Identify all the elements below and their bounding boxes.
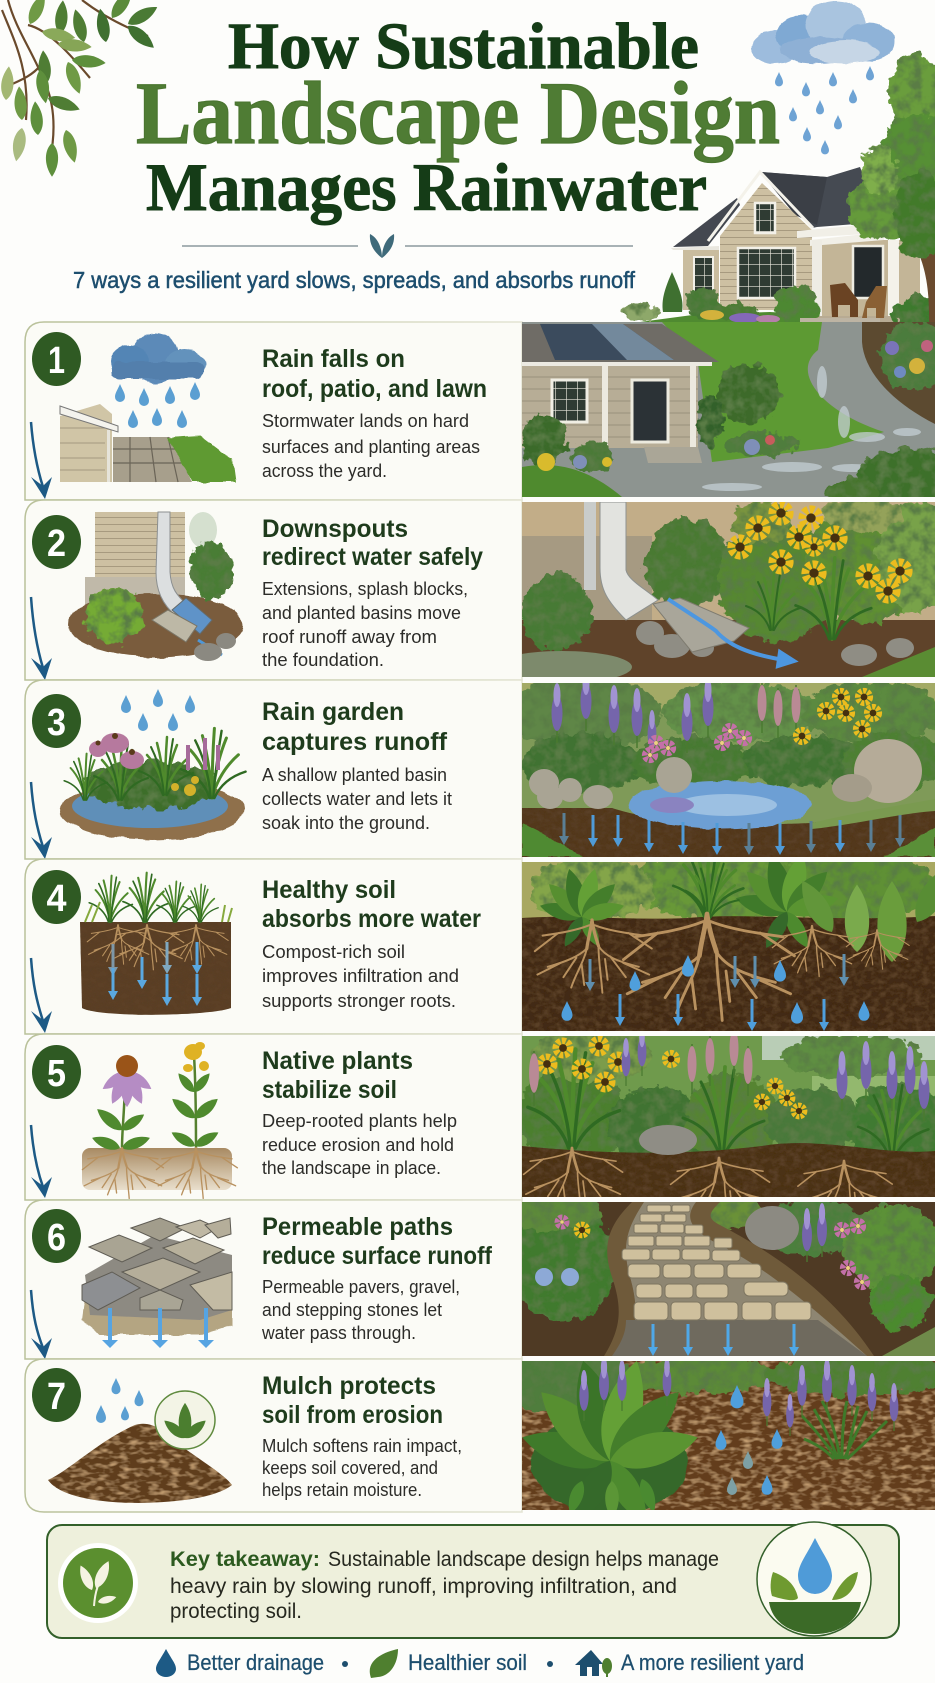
heading [262, 876, 481, 933]
rock [745, 1206, 799, 1250]
illustration: tree [848, 54, 935, 326]
step number 3 [32, 694, 81, 748]
pink spikes [758, 683, 766, 733]
body text: A shallow planted basin [262, 765, 447, 785]
body text: Deep-rooted plants help [262, 1111, 457, 1131]
separator dot [547, 1661, 553, 1667]
heading: Native plants [262, 1047, 413, 1075]
rocks [529, 757, 692, 809]
left roof [673, 198, 740, 247]
step number 2: 2 [47, 523, 66, 565]
coneflower [100, 1055, 154, 1107]
wet path highlights [702, 366, 921, 491]
infiltration arrows [559, 813, 905, 855]
icon: downspout with splash block [67, 512, 243, 661]
purple spikes [552, 683, 562, 743]
heading [262, 698, 448, 756]
drops [716, 1385, 782, 1495]
icon: cloud, rain and yard [60, 333, 236, 482]
label: a more resilient yard: A more resilient yard [621, 1650, 804, 1675]
soil [522, 801, 935, 857]
porch steps [800, 318, 880, 324]
panel background [25, 500, 522, 680]
title line 2: Landscape Design [136, 65, 780, 163]
big leaves [538, 867, 626, 950]
body text: Stormwater lands on hard [262, 411, 469, 431]
body text [262, 1111, 457, 1178]
body text: and stepping stones let [262, 1300, 442, 1320]
blue arrows [648, 1324, 799, 1356]
icon: soil block with roots [80, 873, 232, 1015]
body text: across the yard. [262, 461, 387, 481]
heading: Permeable paths [262, 1213, 453, 1241]
body text [262, 765, 452, 833]
rock [639, 1125, 697, 1155]
heading: Mulch protects [262, 1372, 436, 1400]
subtitle: 7 ways a resilient yard slows, spreads, and absorbs runoff [73, 267, 636, 293]
panel 4: healthy soil [25, 859, 522, 1034]
heading: reduce surface runoff [262, 1242, 493, 1270]
step number 4 [32, 870, 81, 924]
step number 1: 1 [48, 340, 65, 382]
blue flow arrow [668, 599, 794, 666]
panel 6: permeable paths [25, 1200, 522, 1359]
takeaway text [170, 1548, 719, 1623]
body text: Extensions, splash blocks, [262, 579, 468, 599]
edging [604, 1202, 874, 1356]
body text: water pass through. [261, 1323, 416, 1343]
separator dot [342, 1661, 348, 1667]
heading: absorbs more water [262, 905, 481, 933]
foliage mass [517, 1030, 935, 1169]
footer benefits [156, 1649, 804, 1678]
arrow to step 2 [31, 422, 52, 499]
foliage mass [521, 496, 935, 650]
arrow to step 7 [31, 1290, 52, 1359]
body text: helps retain moisture. [262, 1480, 422, 1500]
takeaway text: Sustainable landscape design helps manage [328, 1548, 719, 1571]
takeaway panel [47, 1522, 899, 1638]
foliage [522, 364, 935, 506]
heading: roof, patio, and lawn [262, 375, 487, 403]
photo 3: rain garden pond [522, 683, 935, 857]
panel background [25, 1200, 522, 1359]
panel 7: mulch [25, 1359, 522, 1512]
title [136, 10, 780, 225]
icon: leaf circle [58, 1543, 138, 1623]
paver stones [622, 1205, 811, 1320]
illustration: rain cloud with drops [751, 1, 895, 154]
grass blades [796, 558, 871, 639]
step number 4: 4 [46, 878, 66, 920]
downspouts [584, 502, 596, 590]
purple spikes [579, 1370, 589, 1421]
foliage mass [502, 677, 935, 793]
arrow to step 3 [31, 597, 52, 680]
body text: Compost-rich soil [262, 942, 405, 962]
heading: captures runoff [262, 728, 448, 756]
flowers by the porch [700, 310, 780, 323]
step number 5 [32, 1045, 81, 1099]
mossy edge [812, 799, 935, 829]
soil [522, 1143, 935, 1197]
step number 7: 7 [47, 1376, 66, 1418]
takeaway text: Key takeaway: [170, 1548, 320, 1571]
body text [261, 1277, 460, 1343]
arrow to step 6 [31, 1125, 52, 1198]
arrow to step 5 [31, 958, 52, 1033]
body text [262, 1436, 462, 1500]
step number 7 [32, 1368, 81, 1422]
photo 4: roots in soil [522, 862, 935, 1031]
right mulch bed [862, 322, 935, 424]
roof [522, 324, 719, 362]
step number 1 [32, 332, 81, 386]
takeaway text: heavy rain by slowing runoff, improving infiltration, and [170, 1575, 677, 1598]
icon: water drop [156, 1649, 176, 1677]
yellow flowers [732, 505, 908, 599]
heading: Rain garden [262, 698, 404, 726]
arrow to step 4 [31, 782, 52, 859]
heading [262, 1047, 413, 1104]
back foliage [492, 1347, 935, 1411]
wing wall [683, 250, 719, 310]
water drops and arrows [562, 954, 870, 1031]
heading [262, 1213, 493, 1270]
takeaway background [47, 1525, 899, 1638]
icon: planted rain garden [60, 689, 246, 840]
photo 6: stone path [522, 1202, 935, 1356]
icon: house and tree [575, 1650, 612, 1677]
heading: stabilize soil [262, 1076, 397, 1104]
panel background [25, 1034, 522, 1200]
shrubs [662, 272, 683, 312]
body text [262, 411, 480, 481]
soil [522, 916, 935, 1031]
blooms [540, 1039, 804, 1116]
illustration: house [618, 167, 935, 328]
right plant [802, 1401, 887, 1459]
heading [262, 345, 487, 403]
title line 1: How Sustainable [228, 10, 699, 83]
body text: collects water and lets it [262, 789, 452, 809]
roots [535, 920, 652, 993]
body text [262, 579, 468, 670]
photo 7: mulched planting [522, 1361, 935, 1510]
heading: Downspouts [262, 515, 408, 543]
lawn [662, 322, 884, 462]
panel background [25, 859, 522, 1034]
icon: two native plants with roots [82, 1042, 237, 1198]
wall [522, 366, 698, 448]
body text: improves infiltration and [262, 966, 459, 986]
panel background [25, 322, 522, 500]
foliage [530, 848, 935, 922]
body text: reduce erosion and hold [262, 1135, 454, 1155]
rocks [636, 621, 914, 666]
title line 3: Manages Rainwater [146, 149, 707, 225]
body text: Permeable pavers, gravel, [262, 1277, 460, 1297]
body text: surfaces and planting areas [262, 437, 480, 457]
icon: drop and seedling badge [757, 1522, 871, 1636]
roots [524, 1148, 623, 1210]
illustration: leafy branch [0, 0, 160, 177]
pond [628, 781, 812, 829]
step number 6 [32, 1209, 81, 1263]
left and right planting [502, 1194, 935, 1330]
step number 6: 6 [47, 1217, 66, 1259]
takeaway text: protecting soil. [170, 1600, 302, 1623]
body text: the landscape in place. [262, 1158, 441, 1178]
puddle and lawn [492, 651, 632, 683]
body text: keeps soil covered, and [262, 1458, 438, 1478]
heading: Healthy soil [262, 876, 396, 904]
label: healthier soil: Healthier soil [408, 1650, 527, 1675]
step number 3: 3 [47, 702, 66, 744]
divider with leaf ornament [182, 234, 633, 258]
panel 2: downspouts [25, 500, 522, 680]
flower dots [537, 453, 612, 471]
panel background [25, 680, 522, 859]
photo 2: downspout garden bed [522, 502, 935, 677]
grass corners [522, 823, 935, 857]
icon: permeable pavers [82, 1218, 232, 1348]
body text: and planted basins move [262, 603, 461, 623]
icon: mulch pile [48, 1378, 232, 1503]
porch chairs [830, 283, 858, 317]
panel 1: rain falls [25, 322, 522, 500]
heading: redirect water safely [262, 543, 483, 571]
heading: soil from erosion [262, 1401, 443, 1429]
leaf badge [155, 1391, 215, 1449]
body text: supports stronger roots. [262, 991, 456, 1011]
step number 5: 5 [47, 1053, 66, 1095]
gable wall [720, 183, 812, 310]
body text: Mulch softens rain impact, [262, 1436, 462, 1456]
ground [522, 620, 935, 677]
step number 2 [32, 515, 81, 569]
photo 1: house in the rain [522, 322, 935, 497]
icon: green leaf [370, 1649, 398, 1678]
body text: the foundation. [262, 650, 384, 670]
body text [262, 942, 459, 1011]
hosta [532, 1411, 688, 1515]
lawn bottom right [882, 1327, 935, 1356]
right roof [762, 167, 882, 228]
flowers [535, 1217, 867, 1287]
photo 5: native plant border [522, 1036, 935, 1197]
porch [820, 240, 920, 318]
lawn and beds under the house [640, 312, 935, 322]
mulch ground [522, 1361, 935, 1510]
panel 3: rain garden [25, 680, 522, 859]
panel background [25, 1359, 522, 1512]
path gravel [622, 1202, 867, 1356]
lower left lawn [522, 465, 622, 497]
label: better drainage: Better drainage [187, 1650, 324, 1675]
heading: Rain falls on [262, 345, 405, 373]
body text: soak into the ground. [262, 813, 430, 833]
heading [262, 1372, 443, 1429]
pink and yellow blooms [645, 691, 879, 760]
body text: roof runoff away from [262, 627, 437, 647]
heading [262, 515, 483, 571]
panel 5: native plants [25, 1034, 522, 1200]
